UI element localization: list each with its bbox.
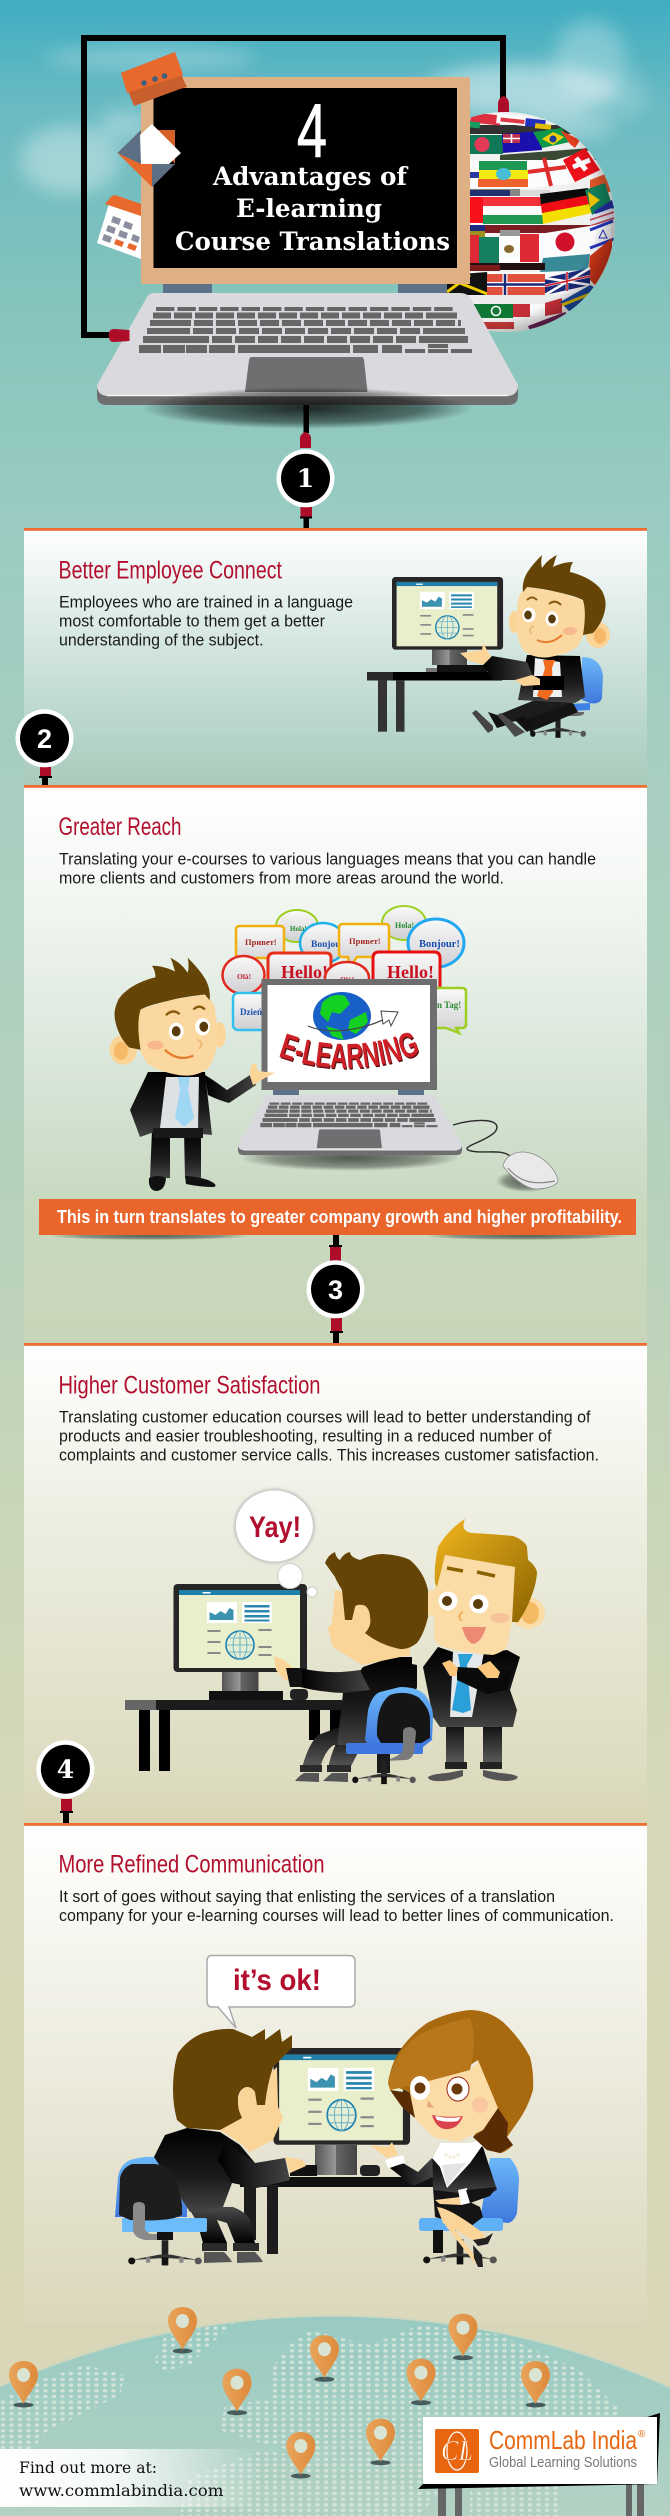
connector and badge 1 — [276, 405, 334, 529]
callout banner: This in turn translates to greater company growth and higher profitability. — [57, 1207, 622, 1227]
body text: more clients and customers from more areas around the world. — [59, 868, 504, 887]
laptop base — [97, 293, 518, 405]
logo mark: CL — [441, 2435, 473, 2467]
usb plug — [109, 329, 130, 342]
panel 4: more refined communication — [24, 1823, 647, 2323]
logo mark — [435, 2429, 479, 2473]
cable frame — [84, 38, 503, 335]
title: Advantages of — [212, 162, 409, 191]
commlab india logo billboard: ® — [638, 2429, 646, 2440]
laptop screen frame — [141, 77, 470, 284]
standing man — [423, 1519, 545, 1781]
find out more text box: Find out more at: — [19, 2458, 157, 2477]
body text: most comfortable to them get a better — [59, 611, 325, 630]
speech bubbles in many languages: Привет! — [349, 936, 381, 946]
illustration: man at desk — [367, 555, 610, 738]
speech bubble icon — [121, 52, 187, 106]
man from behind — [115, 2029, 306, 2265]
location pins — [9, 2307, 550, 2478]
body text: understanding of the subject. — [59, 630, 264, 649]
man presenting — [110, 958, 275, 1191]
body text — [59, 592, 353, 649]
panel 3: higher customer satisfaction — [24, 1343, 647, 1823]
clouds — [20, 20, 647, 194]
commlab india logo billboard: CommLab India — [489, 2425, 637, 2455]
find out more text box — [0, 2449, 260, 2507]
its ok speech bubble — [207, 1956, 355, 2028]
calendar icon — [97, 195, 141, 259]
speech bubbles in many languages: Hello! — [387, 962, 434, 982]
laptop with e-learning globe: E-LEARNING — [280, 1032, 418, 1068]
speech bubbles in many languages: Bonjou — [311, 940, 341, 950]
plug on globe — [498, 96, 509, 113]
speech bubbles in many languages: Dzień — [240, 1007, 262, 1017]
yay thought bubble — [234, 1489, 317, 1597]
chair and seated man from behind — [274, 1552, 433, 1784]
connector and badge 3: 3 — [328, 1275, 343, 1305]
header illustration: laptop with globe and title — [84, 38, 615, 429]
speech bubbles in many languages: n Tag! — [437, 1000, 461, 1010]
connector and badge 4: 4 — [57, 1755, 74, 1784]
title: E-learning — [236, 194, 382, 223]
body text: Employees who are trained in a language — [59, 592, 353, 611]
laptop shadow — [142, 387, 472, 429]
yay thought bubble: Yay! — [249, 1511, 301, 1544]
panel 1: better employee connect — [24, 528, 647, 785]
speech bubbles in many languages: Hola! — [290, 925, 307, 933]
speech bubbles in many languages: Hola! — [395, 921, 414, 930]
speech bubbles in many languages — [222, 906, 466, 1033]
title — [175, 89, 450, 256]
earth globe — [308, 992, 398, 1040]
speech bubbles in many languages: Olá! — [340, 975, 354, 984]
connector and badge 1: 1 — [297, 464, 314, 493]
panel 2: greater reach — [24, 785, 647, 1343]
flag globe — [447, 112, 615, 332]
callout banner — [39, 1199, 636, 1240]
body text — [59, 1407, 599, 1464]
speech bubbles in many languages: Привет! — [245, 937, 277, 947]
body text: Translating customer education courses will lead to better understanding of — [59, 1407, 591, 1426]
woman — [370, 2010, 533, 2267]
body text — [59, 1887, 614, 1925]
connector and badge 3 — [306, 1235, 364, 1344]
its ok speech bubble: it’s ok! — [233, 1964, 321, 1997]
illustration: two men at a computer — [125, 1489, 545, 1784]
heading: Greater Reach — [58, 814, 182, 841]
body text — [59, 849, 596, 887]
heading: Higher Customer Satisfaction — [58, 1372, 320, 1399]
mouse and cable — [453, 1120, 558, 1192]
commlab india logo billboard: Global Learning Solutions — [489, 2454, 637, 2471]
e-learning text — [278, 1052, 424, 1068]
title: Course Translations — [175, 227, 450, 256]
body text: company for your e-learning courses will lead to better lines of communication. — [59, 1906, 614, 1925]
speech bubbles in many languages: Olá! — [237, 972, 251, 981]
connector and badge 2: 2 — [37, 724, 52, 754]
speech bubbles in many languages: Hello! — [281, 962, 328, 982]
speech bubbles in many languages: Bonjour! — [419, 939, 460, 950]
title: 4 — [297, 89, 327, 174]
heading: More Refined Communication — [58, 1852, 324, 1879]
heading: Better Employee Connect — [58, 557, 282, 584]
illustration: man and woman at computer — [115, 1956, 533, 2267]
footer world map with dotted continents — [0, 2315, 670, 2516]
laptop screen — [154, 88, 457, 268]
diamond logo icon — [118, 124, 181, 187]
body text: It sort of goes without saying that enlisting the services of a translation — [59, 1887, 555, 1906]
commlab india logo billboard — [418, 2413, 660, 2516]
laptop with e-learning globe: E-LEARNING — [280, 1036, 420, 1070]
body text: complaints and customer service calls. This increases customer satisfaction. — [59, 1445, 599, 1464]
connector and badge 4 — [36, 1740, 94, 1823]
body text: products and easier troubleshooting, resulting in a reduced number of — [59, 1426, 552, 1445]
connector and badge 2 — [16, 709, 74, 786]
body text: Translating your e-courses to various languages means that you can handle — [59, 849, 596, 868]
laptop hinges — [163, 284, 447, 294]
laptop with e-learning globe — [238, 979, 462, 1170]
find out more text box: www.commlabindia.com — [19, 2481, 224, 2500]
